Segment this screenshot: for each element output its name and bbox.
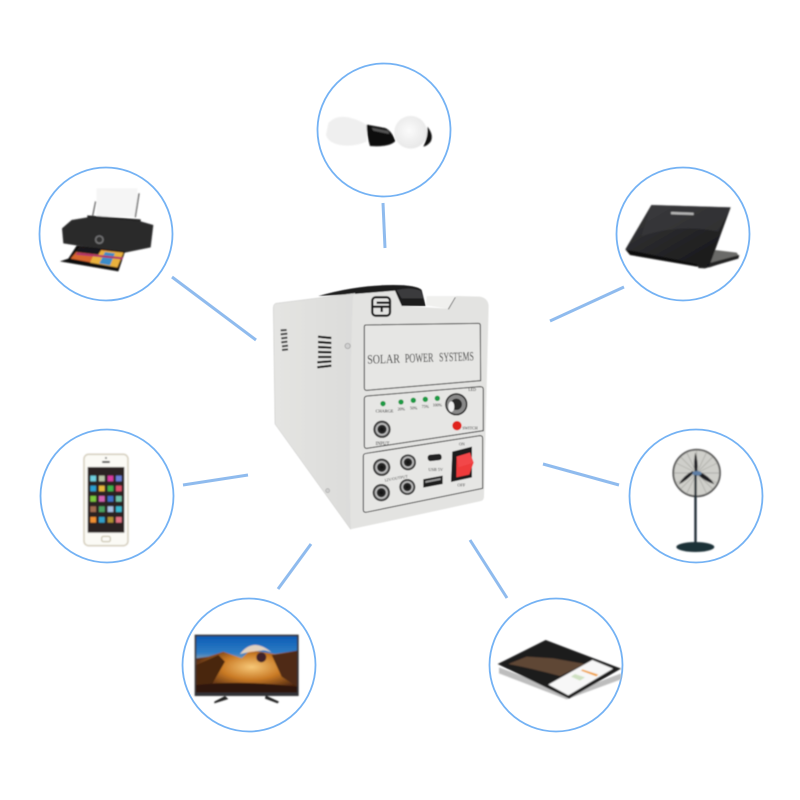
panel: laptop	[616, 168, 750, 300]
LED labels: SWITCH	[462, 425, 478, 430]
LED labels: 20%	[398, 407, 406, 412]
title: product name	[367, 349, 474, 367]
arrow: bulb connector	[383, 203, 385, 248]
LED labels: 50%	[410, 406, 418, 411]
panel: light bulbs	[318, 64, 450, 196]
LED labels: 100%	[433, 402, 443, 407]
rocker switch	[451, 447, 472, 482]
output labels: OFF	[457, 483, 466, 488]
icon: brand logo	[372, 297, 390, 316]
indicator panel	[364, 387, 483, 448]
arrow: fan connector	[543, 464, 619, 485]
icon: tablet	[498, 640, 621, 699]
panel: television	[182, 598, 316, 732]
USB-A port	[423, 476, 443, 488]
panel: tablet	[490, 598, 622, 732]
label panel	[364, 323, 481, 390]
arrow: laptop connector	[550, 287, 624, 321]
output panel	[363, 436, 483, 512]
output jacks	[373, 459, 390, 476]
panel: fan	[630, 430, 762, 562]
output labels: 12V/OUTPUT	[384, 473, 409, 483]
LED lamp	[446, 394, 467, 415]
panel: solar power system unit	[273, 285, 489, 529]
arrow: phone connector	[183, 475, 248, 485]
USB-C port	[427, 454, 442, 461]
input jack	[373, 421, 391, 438]
output labels: USB 5V	[428, 467, 444, 472]
status LEDs	[380, 396, 440, 406]
arrow: tablet connector	[470, 540, 507, 598]
screws	[345, 343, 350, 349]
icon: television	[195, 635, 299, 703]
red switch button	[452, 421, 462, 430]
handle	[318, 285, 426, 306]
LED labels: LED	[468, 387, 476, 392]
icon: light bulbs	[326, 116, 432, 149]
icon: laptop	[625, 205, 739, 268]
icon: smartphone	[84, 454, 128, 546]
icon: standing fan	[673, 450, 720, 552]
panel: smartphone	[40, 430, 174, 562]
side vents	[281, 330, 288, 350]
arrow: tv connector	[278, 544, 311, 589]
output labels	[384, 442, 466, 488]
LED labels: INPUT	[376, 442, 390, 447]
title: product name: SYSTEMS	[439, 349, 474, 364]
panel: printer	[40, 168, 172, 300]
LED labels	[376, 387, 478, 447]
LED labels: CHARGE	[376, 408, 394, 413]
side of case	[273, 293, 355, 529]
connector lines	[172, 203, 624, 598]
output labels: ON	[459, 442, 465, 447]
LED labels: 75%	[422, 404, 430, 409]
arrow: printer connector	[172, 277, 256, 340]
front of case	[350, 291, 489, 529]
title: product name: POWER	[405, 351, 434, 365]
title: product name: SOLAR	[367, 352, 401, 367]
icon: printer	[60, 188, 153, 271]
